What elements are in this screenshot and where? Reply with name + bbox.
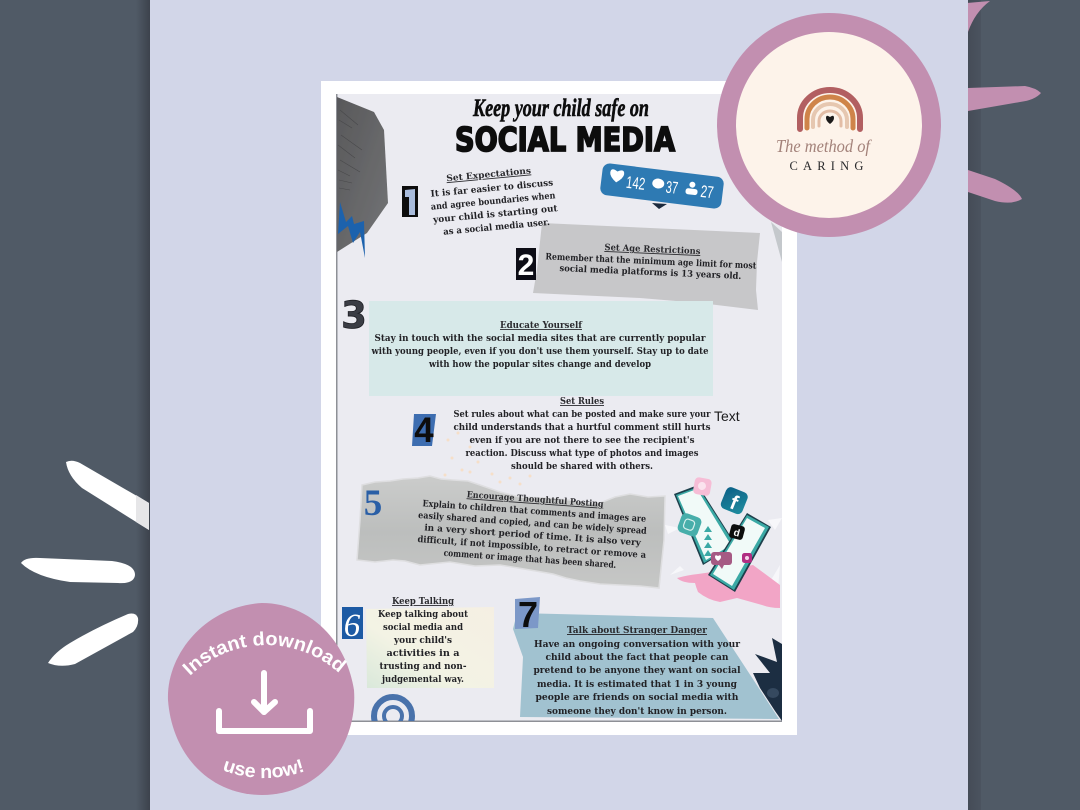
- number 5: 5: [364, 483, 382, 524]
- pink rays, right: [967, 1, 1041, 203]
- text 7: child about the fact that people can: [546, 652, 729, 663]
- text 1: your child is starting out: [432, 204, 559, 226]
- person icon: [685, 181, 699, 195]
- text 1: as a social media user.: [443, 218, 550, 238]
- text 3: Educate Yourself: [500, 321, 583, 331]
- phone illustration: [665, 477, 782, 608]
- icon: instagram: [676, 512, 703, 538]
- decoration: faint orange dots: [444, 432, 532, 486]
- text 7: Have an ongoing conversation with your: [534, 639, 741, 650]
- text 6: your child's: [393, 636, 452, 646]
- curved text: use now: [222, 770, 308, 778]
- number 3: 3: [341, 294, 367, 337]
- logo badge: [717, 13, 941, 237]
- number 2: 2: [518, 249, 534, 282]
- curved text: instant download: [190, 645, 340, 676]
- text 1: It is far easier to discuss: [430, 178, 554, 200]
- text 4: Set rules about what can be posted and make sure your: [454, 410, 711, 420]
- like counter badge: 27: [699, 182, 715, 202]
- text 5: Encourage Thoughtful Posting: [466, 490, 604, 510]
- text 4: Set Rules: [560, 397, 604, 407]
- text 5: Explain to children that comments and images are: [422, 499, 647, 525]
- text 2: social media platforms is 13 years old.: [559, 264, 742, 282]
- number 7: 7: [518, 594, 538, 635]
- text 4: [454, 397, 711, 472]
- section 6: keep talking: [342, 597, 494, 721]
- text 6: judgemental way.: [381, 675, 464, 685]
- text 2: Remember that the minimum age limit for most: [545, 252, 757, 272]
- decoration: blue rainbow: [371, 694, 415, 721]
- decoration: blue lightning: [338, 202, 365, 258]
- title: [455, 95, 675, 159]
- rainbow logo: [800, 90, 860, 129]
- number 6: 6: [344, 608, 361, 644]
- like counter badge: 142: [625, 173, 646, 194]
- text 3: with how the popular sites change and develop: [428, 360, 651, 370]
- like counter badge: 37: [665, 178, 679, 198]
- pink hand: [677, 565, 780, 608]
- section 1: set expectations: [402, 164, 560, 239]
- like counter badge: [600, 163, 724, 209]
- text 1: Set Expectations: [446, 166, 532, 184]
- section 3: educate yourself: [341, 294, 713, 396]
- white page border: [321, 81, 797, 735]
- download badge: [168, 603, 354, 795]
- title bold line: SOCIAL MEDIA: [455, 120, 675, 159]
- text 6: activities in a: [386, 649, 460, 659]
- text 4: should be shared with others.: [511, 462, 653, 472]
- right phone: [708, 513, 771, 592]
- icon: snapchat: [693, 477, 712, 496]
- heart: [826, 116, 834, 124]
- icon: like bubble: [711, 552, 732, 569]
- text 6: Keep talking about: [378, 610, 469, 620]
- decoration: dark spiky shape: [753, 638, 782, 721]
- light backing panel: [150, 0, 968, 810]
- text 4: child understands that a hurtful comment still hurts: [454, 423, 710, 433]
- title script line: Keep your child safe on: [472, 95, 649, 122]
- torn grey paper: [357, 476, 665, 588]
- comment icon: [652, 178, 665, 189]
- text 5: comment or image that has been shared.: [443, 549, 617, 571]
- stray text label: Text: [714, 408, 740, 424]
- icon: tiktok: d: [732, 527, 741, 540]
- text 7: media. It is estimated that 1 in 3 young: [537, 679, 737, 690]
- section 4: set rules: [412, 397, 740, 486]
- icon: facebook: f: [727, 492, 741, 515]
- white rays, left: [21, 461, 149, 666]
- text 6: trusting and non-: [380, 662, 467, 672]
- text 1: [428, 164, 560, 239]
- icon: magenta badge: [742, 553, 752, 563]
- text 2: Set Age Restrictions: [604, 243, 701, 257]
- number 1: [402, 186, 418, 217]
- poster sheet: [321, 81, 797, 735]
- icon: download arrow: [219, 673, 310, 731]
- logo script text: The method of: [776, 136, 873, 156]
- text 5: difficult, if not impossible, to retract or remove a: [417, 535, 646, 561]
- text 4: reaction. Discuss what type of photos and images: [466, 449, 698, 459]
- left shadow: [136, 0, 150, 810]
- text 7: Talk about Stranger Danger: [567, 625, 708, 636]
- text 2: [545, 240, 758, 283]
- section 7: stranger danger: [513, 594, 782, 721]
- text 1: and agree boundaries when: [430, 191, 556, 213]
- pale paper: [366, 607, 494, 688]
- text 3: with young people, even if you don't use them yourself. Stay up to date: [371, 347, 709, 357]
- download badge: Instant download: [182, 631, 347, 676]
- left phone: [674, 485, 736, 565]
- text 5: in a very short period of time. It is also very: [424, 523, 642, 549]
- blue paper: [513, 613, 779, 719]
- text 6: Keep Talking: [392, 597, 454, 607]
- text 7: pretend to be anyone they want on social: [534, 665, 741, 676]
- logo caring text: CARING: [789, 159, 869, 173]
- text 3: [371, 321, 709, 370]
- download badge: use now!: [224, 759, 304, 778]
- section 5: thoughtful posting: [357, 476, 665, 588]
- number 4: 4: [414, 411, 434, 450]
- text 6: social media and: [383, 623, 464, 633]
- text 6: [378, 597, 469, 685]
- heart icon: [609, 169, 625, 183]
- decoration: grey torn shape: [337, 97, 388, 252]
- teal panel: [369, 301, 713, 396]
- text 7: people are friends on social media with: [536, 692, 739, 703]
- decoration: corner triangle: [771, 222, 782, 262]
- text 5: easily shared and copied, and can be widely spread: [418, 511, 648, 537]
- white burst marks: [665, 518, 782, 590]
- grey tape paper: [533, 223, 760, 310]
- text 7: someone they don't know in person.: [547, 706, 727, 717]
- text 3: Stay in touch with the social media sites that are currently popular: [374, 334, 706, 344]
- right shadow: [968, 0, 981, 810]
- teal triangles: [704, 526, 712, 556]
- page interior: [337, 94, 782, 721]
- section 2: age restrictions: [516, 240, 758, 283]
- text 4: even if you are not there to see the recipient's: [470, 436, 694, 446]
- text 7: [534, 625, 741, 717]
- text 5: [415, 487, 650, 573]
